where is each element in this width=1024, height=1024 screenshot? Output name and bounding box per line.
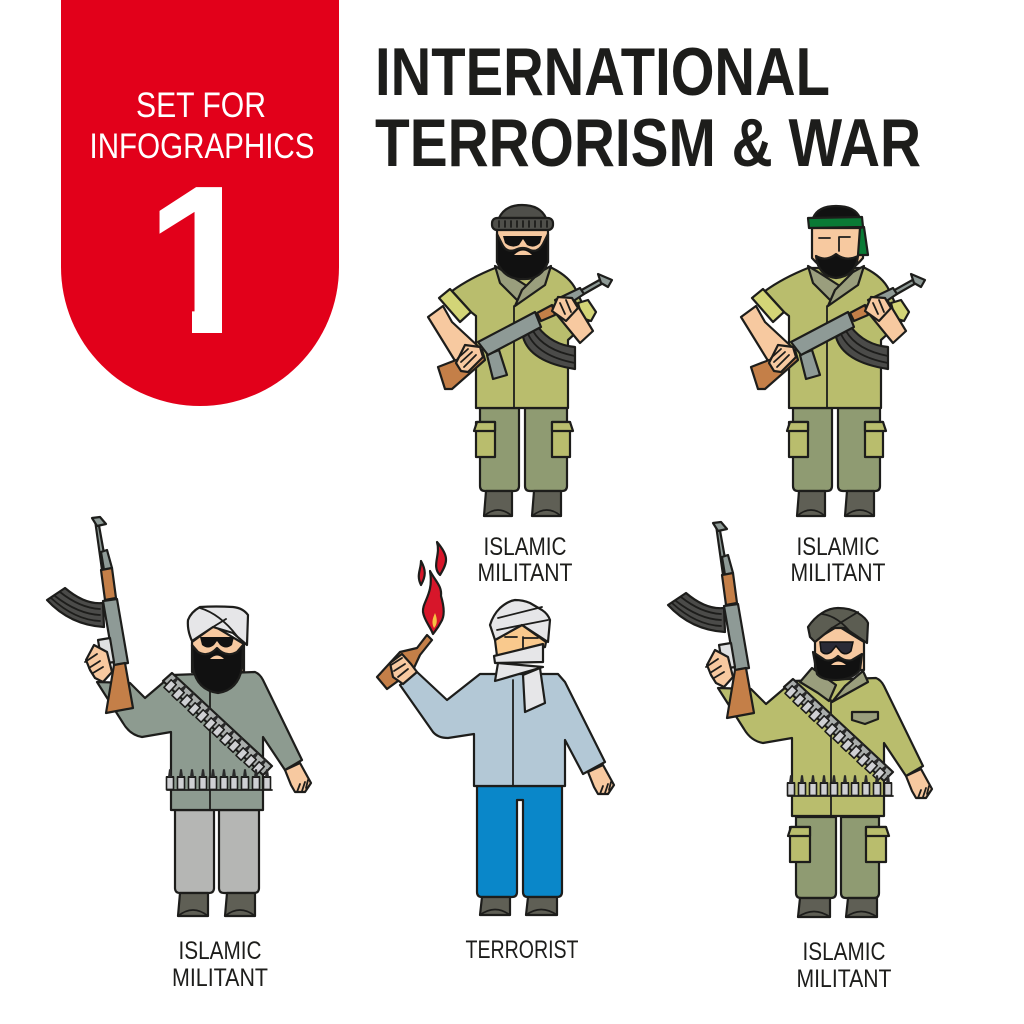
label: islamic militant 5: MILITANT (796, 965, 892, 993)
figure: terrorist with molotov (377, 542, 614, 915)
figure: militant in knit cap (428, 205, 612, 516)
molotov bottle (377, 635, 432, 689)
red badge (61, 0, 339, 406)
chest pocket (852, 712, 878, 724)
head with dark turban and beard (800, 608, 868, 702)
label: islamic militant 5 (796, 938, 892, 993)
label: islamic militant 5: ISLAMIC (802, 938, 886, 966)
title: TERRORISM & WAR (375, 105, 921, 181)
label: islamic militant 3 (172, 937, 268, 992)
ammunition belts (784, 679, 893, 796)
label: islamic militant 1: MILITANT (478, 559, 572, 587)
label: islamic militant 2: ISLAMIC (796, 533, 880, 561)
label: islamic militant 1: ISLAMIC (484, 533, 566, 561)
figure: militant in olive jacket and dark turban (668, 522, 932, 917)
head with green headband (808, 206, 868, 278)
boots (798, 898, 877, 917)
boots (178, 893, 255, 916)
grey jacket (97, 672, 302, 810)
head with turban and beard (188, 606, 248, 693)
label: islamic militant 3: ISLAMIC (178, 937, 262, 965)
label: islamic militant 2 (790, 533, 886, 587)
label: islamic militant 1 (478, 533, 572, 587)
figure: militant with green headband (741, 206, 925, 516)
badge label: infographics: INFOGRAPHICS (90, 127, 314, 166)
label: islamic militant 3: MILITANT (172, 964, 268, 992)
right hand (588, 765, 614, 794)
badge label: set for: SET FOR (136, 86, 266, 125)
title: INTERNATIONAL (375, 34, 830, 110)
label: terrorist: TERRORIST (466, 936, 578, 964)
light blue jacket (400, 672, 605, 786)
trouser pockets (788, 827, 889, 862)
badge number: 1 (145, 141, 263, 378)
head with turban and scarf (490, 600, 550, 712)
flames (419, 542, 446, 634)
ammunition belts (163, 673, 272, 790)
title (375, 34, 921, 181)
olive jacket (718, 678, 923, 816)
label: islamic militant 2: MILITANT (790, 559, 886, 587)
figure: militant in white turban (47, 517, 311, 916)
blue trousers (477, 786, 562, 897)
grey trousers (175, 810, 259, 893)
olive trousers (796, 817, 879, 898)
head with cap, sunglasses and beard (492, 205, 553, 279)
boots (480, 897, 557, 915)
